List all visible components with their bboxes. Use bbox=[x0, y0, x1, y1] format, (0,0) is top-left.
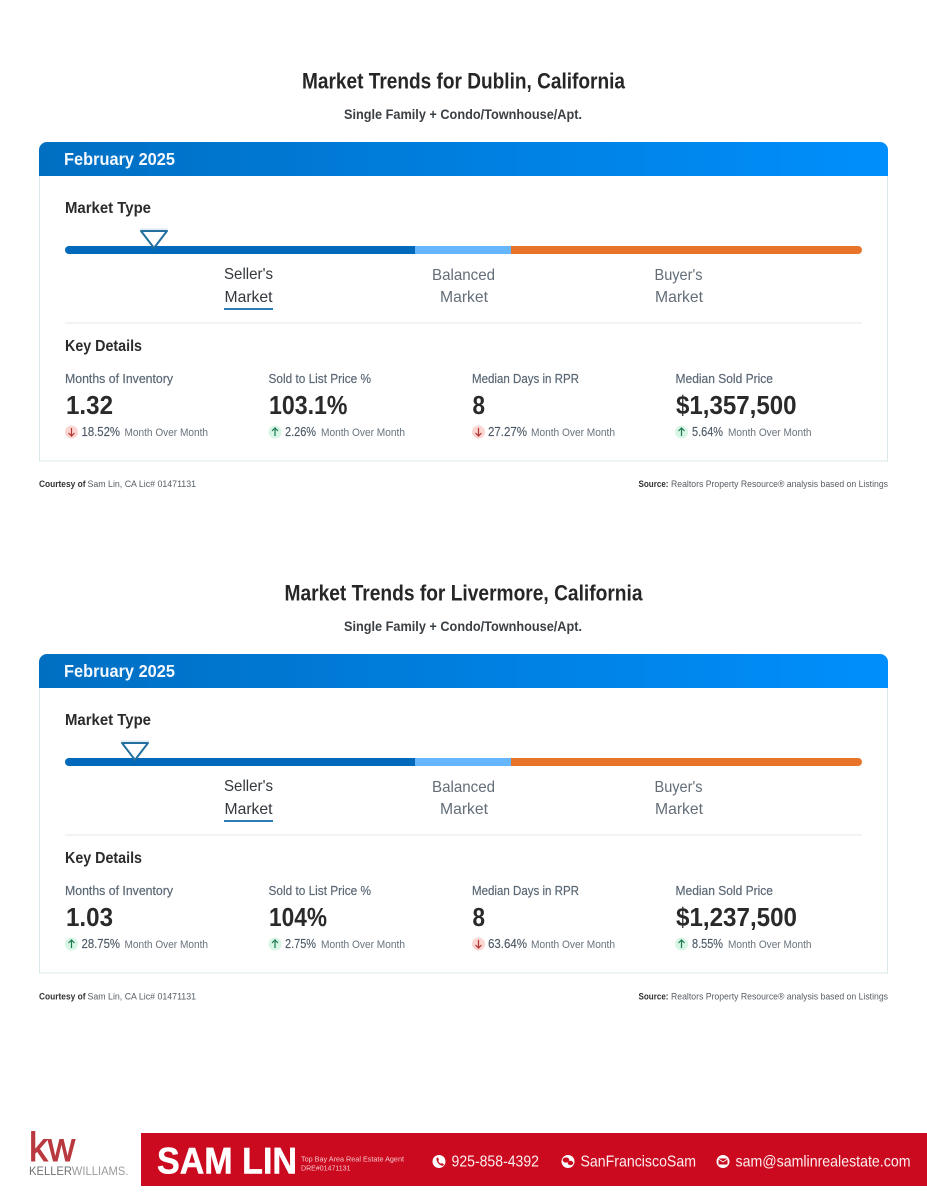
icon: phone bbox=[432, 1155, 446, 1168]
logo: Keller Williams bbox=[29, 1124, 128, 1178]
stat: median sold price: $1,357,500 bbox=[676, 392, 796, 420]
stat: median days in RPR: Month Over Month bbox=[531, 427, 615, 439]
stat: sold to list price: Sold to List Price % bbox=[268, 371, 371, 386]
courtesy note: Sam Lin, CA Lic# 01471131 bbox=[88, 479, 196, 489]
agent name: SAM LIN bbox=[157, 1140, 297, 1182]
stat: median sold price: 8.55% bbox=[692, 936, 723, 951]
title: Dublin: Market Trends for Dublin, California bbox=[302, 68, 626, 94]
icon: wechat bbox=[562, 1155, 574, 1168]
courtesy note: Courtesy of bbox=[39, 992, 86, 1002]
courtesy note bbox=[39, 479, 196, 489]
stat: median sold price: Median Sold Price bbox=[676, 371, 773, 386]
stat: median days in RPR: 8 bbox=[472, 904, 485, 932]
marker glow bbox=[140, 228, 168, 231]
stat: median sold price: Month Over Month bbox=[728, 427, 812, 439]
label: seller's market: Seller's bbox=[224, 778, 273, 795]
stat: median days in RPR: Median Days in RPR bbox=[472, 883, 579, 898]
label: buyer's market bbox=[654, 267, 704, 306]
card outline bbox=[40, 682, 888, 973]
agent tagline: Top Bay Area Real Estate Agent bbox=[301, 1154, 405, 1164]
stat: median sold price bbox=[675, 371, 812, 439]
stat: months of inventory: 1.03 bbox=[66, 904, 113, 932]
label: balanced market: Balanced bbox=[432, 267, 495, 284]
stat: median days in RPR bbox=[472, 371, 615, 439]
stat: months of inventory: 1.32 bbox=[66, 392, 113, 420]
header band bbox=[39, 142, 888, 176]
stat: median sold price: $1,237,500 bbox=[676, 904, 797, 932]
label: seller's market: Market bbox=[224, 801, 273, 818]
label: seller's market bbox=[224, 778, 273, 822]
stat: months of inventory: 28.75% bbox=[82, 936, 120, 951]
stat: median sold price: Median Sold Price bbox=[676, 883, 773, 898]
label: buyer's market bbox=[654, 779, 704, 818]
source note: Realtors Property Resource® analysis based on Listings bbox=[671, 479, 888, 489]
heading: key details: Key Details bbox=[65, 338, 142, 355]
panel: Dublin market trends bbox=[39, 68, 888, 489]
label: balanced market: Market bbox=[440, 801, 489, 818]
stat: median sold price: 5.64% bbox=[692, 424, 723, 439]
subtitle: Single Family + Condo/Townhouse/Apt. bbox=[344, 619, 582, 634]
agent tagline: DRE#01471131 bbox=[301, 1164, 350, 1172]
stat: median sold price bbox=[675, 883, 812, 951]
stat: median sold price: Month Over Month bbox=[728, 939, 812, 951]
label: seller's market: Seller's bbox=[224, 266, 273, 283]
label: balanced market bbox=[432, 779, 495, 818]
logo: Keller Williams: KELLERWILLIAMS. bbox=[29, 1164, 128, 1178]
stat: sold to list price bbox=[268, 371, 405, 439]
courtesy note: Sam Lin, CA Lic# 01471131 bbox=[88, 992, 196, 1002]
stat: months of inventory: 18.52% bbox=[82, 424, 120, 439]
stat: months of inventory: Month Over Month bbox=[124, 427, 208, 439]
subtitle: Single Family + Condo/Townhouse/Apt. bbox=[344, 107, 582, 122]
source note: Source: bbox=[638, 992, 668, 1002]
marker triangle bbox=[122, 743, 148, 760]
stat: median days in RPR: 63.64% bbox=[488, 936, 527, 951]
label: buyer's market: Market bbox=[655, 801, 704, 818]
stat: median days in RPR: Month Over Month bbox=[531, 939, 615, 951]
stat: months of inventory bbox=[65, 371, 208, 439]
label: balanced market: Balanced bbox=[432, 779, 495, 796]
label: buyer's market: Buyer's bbox=[654, 779, 703, 796]
stat: median days in RPR: 27.27% bbox=[488, 424, 527, 439]
stat: sold to list price: Month Over Month bbox=[321, 939, 405, 951]
card outline bbox=[40, 170, 888, 461]
header band bbox=[39, 654, 888, 688]
header date: February 2025 bbox=[64, 661, 175, 681]
stat: months of inventory: Months of Inventory bbox=[65, 883, 174, 898]
stat: median days in RPR: Median Days in RPR bbox=[472, 371, 579, 386]
stat: months of inventory: Months of Inventory bbox=[65, 371, 174, 386]
footer banner bbox=[141, 1133, 927, 1186]
header date: February 2025 bbox=[64, 149, 175, 169]
stat: months of inventory: Month Over Month bbox=[124, 939, 208, 951]
wechat handle: SanFranciscoSam bbox=[580, 1154, 696, 1170]
source note: Source: bbox=[638, 479, 668, 489]
label: buyer's market: Buyer's bbox=[654, 267, 703, 284]
courtesy note: Courtesy of bbox=[39, 479, 86, 489]
heading: market type: Market Type bbox=[65, 200, 151, 217]
label: seller's market bbox=[224, 266, 273, 310]
title: Livermore: Market Trends for Livermore, California bbox=[284, 580, 643, 606]
stat: sold to list price: 2.75% bbox=[285, 936, 316, 951]
label: buyer's market: Market bbox=[655, 289, 704, 306]
market type scale bar bbox=[65, 758, 862, 766]
stat: median days in RPR: 8 bbox=[472, 392, 485, 420]
label: balanced market bbox=[432, 267, 495, 306]
panel: Livermore market trends bbox=[39, 580, 888, 1002]
marker glow bbox=[121, 740, 149, 743]
stat: months of inventory bbox=[65, 883, 208, 951]
phone number: 925-858-4392 bbox=[452, 1154, 539, 1170]
heading: market type: Market Type bbox=[65, 712, 151, 729]
stat: median days in RPR bbox=[472, 883, 615, 951]
heading: key details: Key Details bbox=[65, 850, 142, 867]
agent tagline bbox=[301, 1154, 405, 1172]
icon: email bbox=[716, 1155, 730, 1168]
label: balanced market: Market bbox=[440, 289, 489, 306]
logo: Keller Williams: kw bbox=[29, 1124, 75, 1170]
stat: sold to list price: Sold to List Price % bbox=[268, 883, 371, 898]
stat: sold to list price: 104% bbox=[269, 904, 327, 932]
source note: Realtors Property Resource® analysis based on Listings bbox=[671, 992, 888, 1002]
stat: sold to list price: 103.1% bbox=[269, 392, 348, 420]
courtesy note bbox=[39, 992, 196, 1002]
label: seller's market: Market bbox=[224, 289, 273, 306]
stat: sold to list price: 2.26% bbox=[285, 424, 316, 439]
stat: sold to list price bbox=[268, 883, 405, 951]
market type scale bar bbox=[65, 246, 862, 254]
stat: sold to list price: Month Over Month bbox=[321, 427, 405, 439]
marker triangle bbox=[141, 231, 167, 248]
